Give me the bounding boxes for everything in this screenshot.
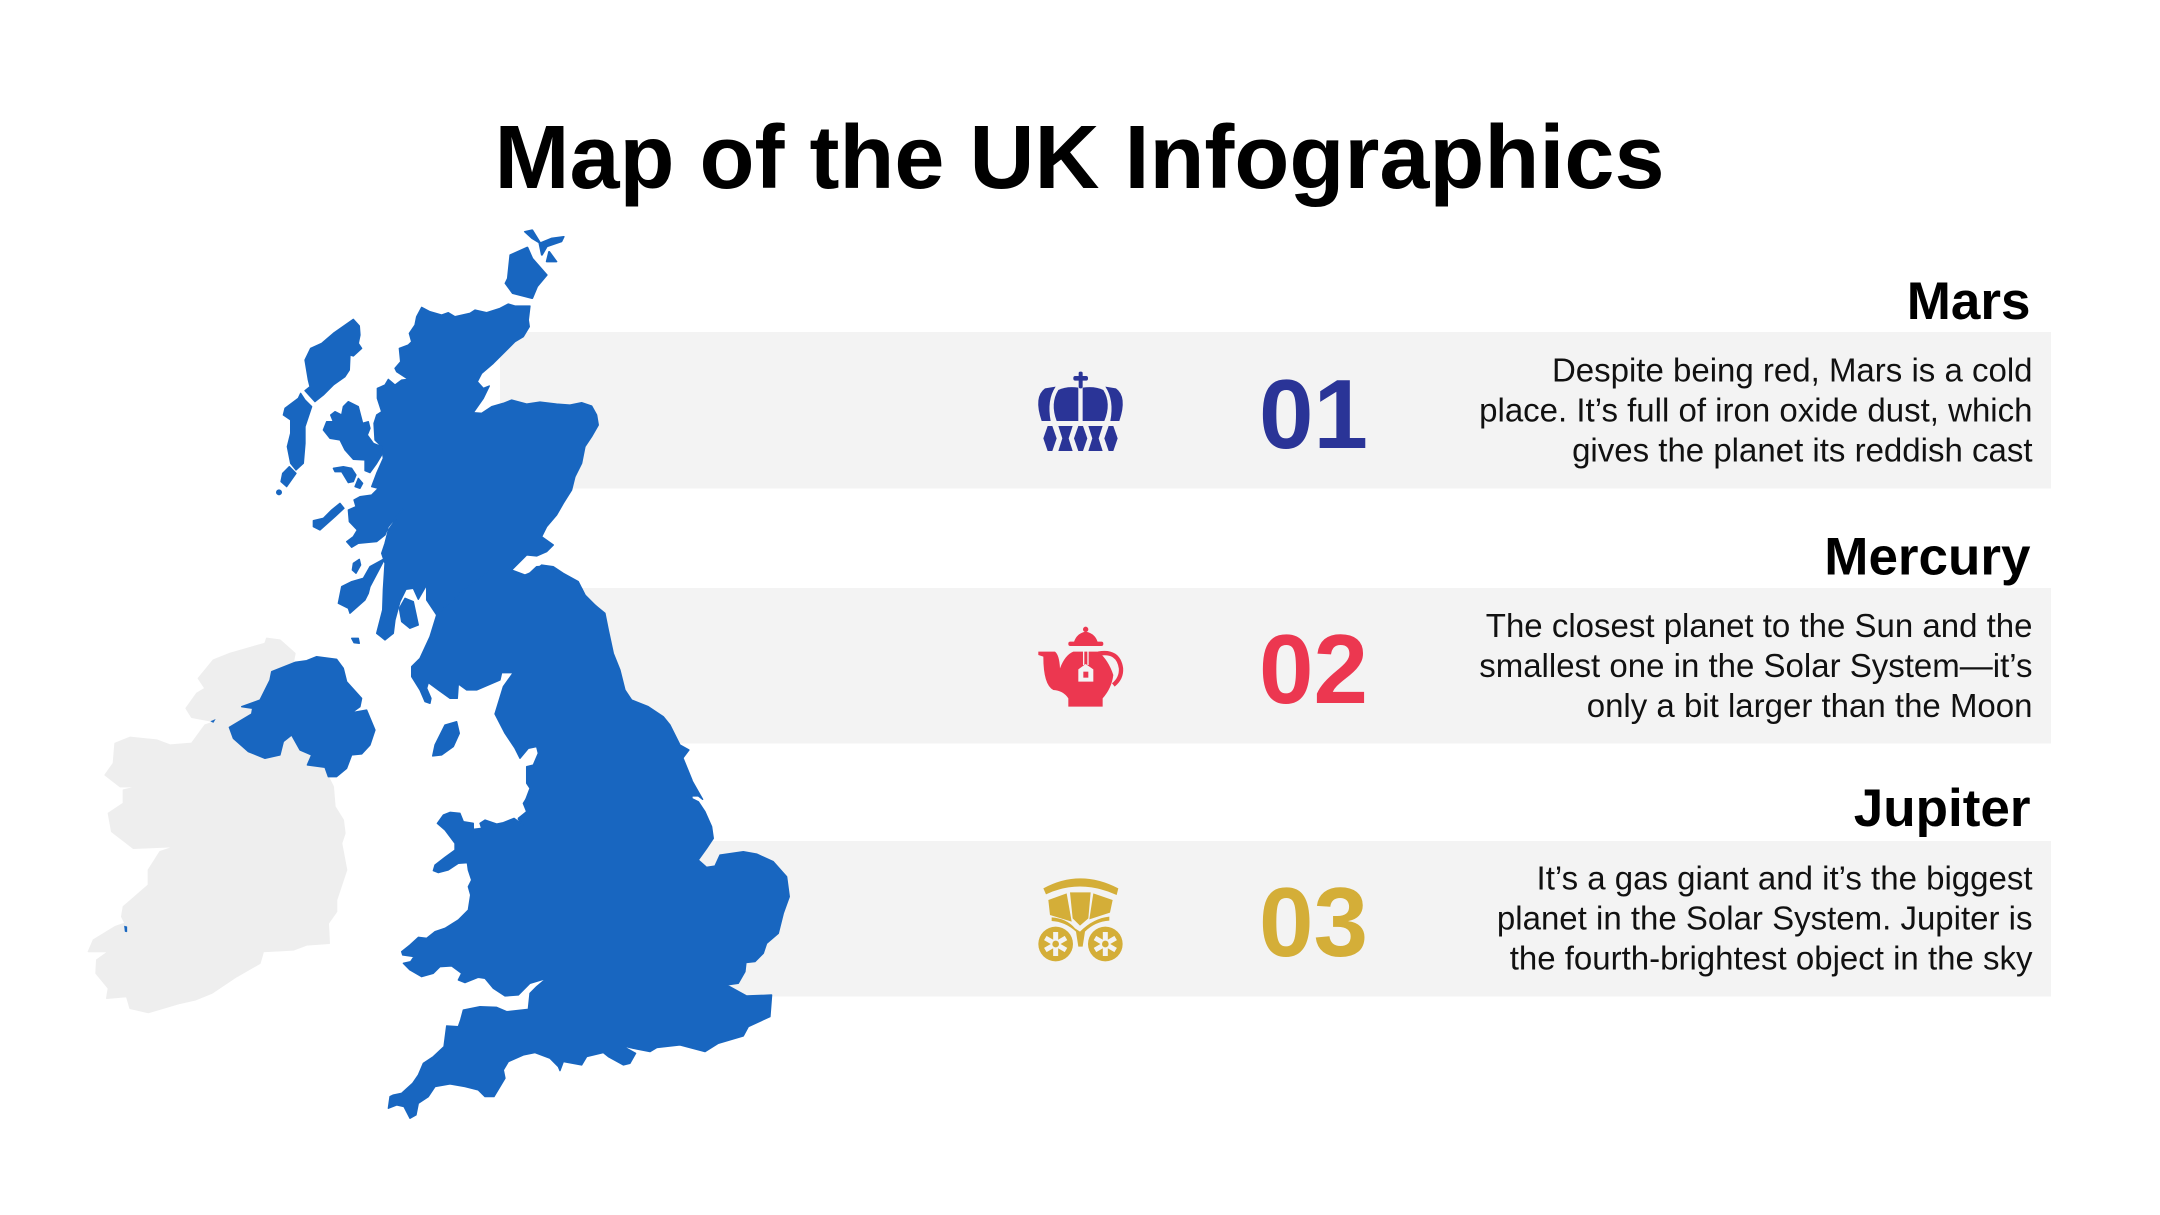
map: northern England and southern Scotland <box>352 566 692 830</box>
map: northern Scotland and Hebrides <box>277 304 608 640</box>
row 1: Mars <box>1038 272 2032 469</box>
map: Isle of Man <box>433 722 459 756</box>
description: Jupiter: It’s a gas giant and it’s the biggest <box>1537 860 2032 896</box>
icon: crown <box>1038 372 1123 451</box>
row 3: Jupiter <box>1038 779 2033 977</box>
number 03: 03 <box>1259 867 1368 977</box>
description: Jupiter: the fourth-brightest object in the sky <box>1510 940 2033 976</box>
map: Ailsa Craig <box>352 638 359 643</box>
map: Orkney and Shetland <box>505 230 564 298</box>
title: Map of the UK Infographics <box>494 108 1664 208</box>
map: Republic of Ireland <box>88 638 347 1013</box>
description: Mars: place. It’s full of iron oxide dust, which <box>1479 392 2032 428</box>
description: Mercury: only a bit larger than the Moon <box>1587 687 2032 724</box>
description: Mars: gives the planet its reddish cast <box>1572 432 2032 468</box>
map: Northern Ireland <box>124 657 375 932</box>
description: Mercury: smallest one in the Solar System—it’s <box>1479 647 2032 684</box>
map: small blue marks on Irish coast <box>124 719 215 932</box>
icon: teapot <box>1038 627 1121 707</box>
map: England and Wales <box>388 780 789 1118</box>
band: row 2 background <box>560 588 2051 744</box>
map of the UK and Ireland <box>88 230 789 1118</box>
description: Jupiter: planet in the Solar System. Jupiter is <box>1497 900 2032 936</box>
band: row 1 background <box>500 332 2051 488</box>
heading: Jupiter: Jupiter <box>1854 779 2030 838</box>
icon: royal carriage <box>1038 878 1123 961</box>
band: row 3 background <box>600 841 2051 996</box>
description: Mars: Despite being red, Mars is a cold <box>1552 352 2032 388</box>
number 01: 01 <box>1259 359 1368 469</box>
number 02: 02 <box>1259 614 1368 724</box>
heading: Mars: Mars <box>1907 272 2030 331</box>
description: Mercury: The closest planet to the Sun and the <box>1486 607 2032 644</box>
row 2: Mercury <box>1038 528 2032 724</box>
heading: Mercury: Mercury <box>1824 528 2031 586</box>
